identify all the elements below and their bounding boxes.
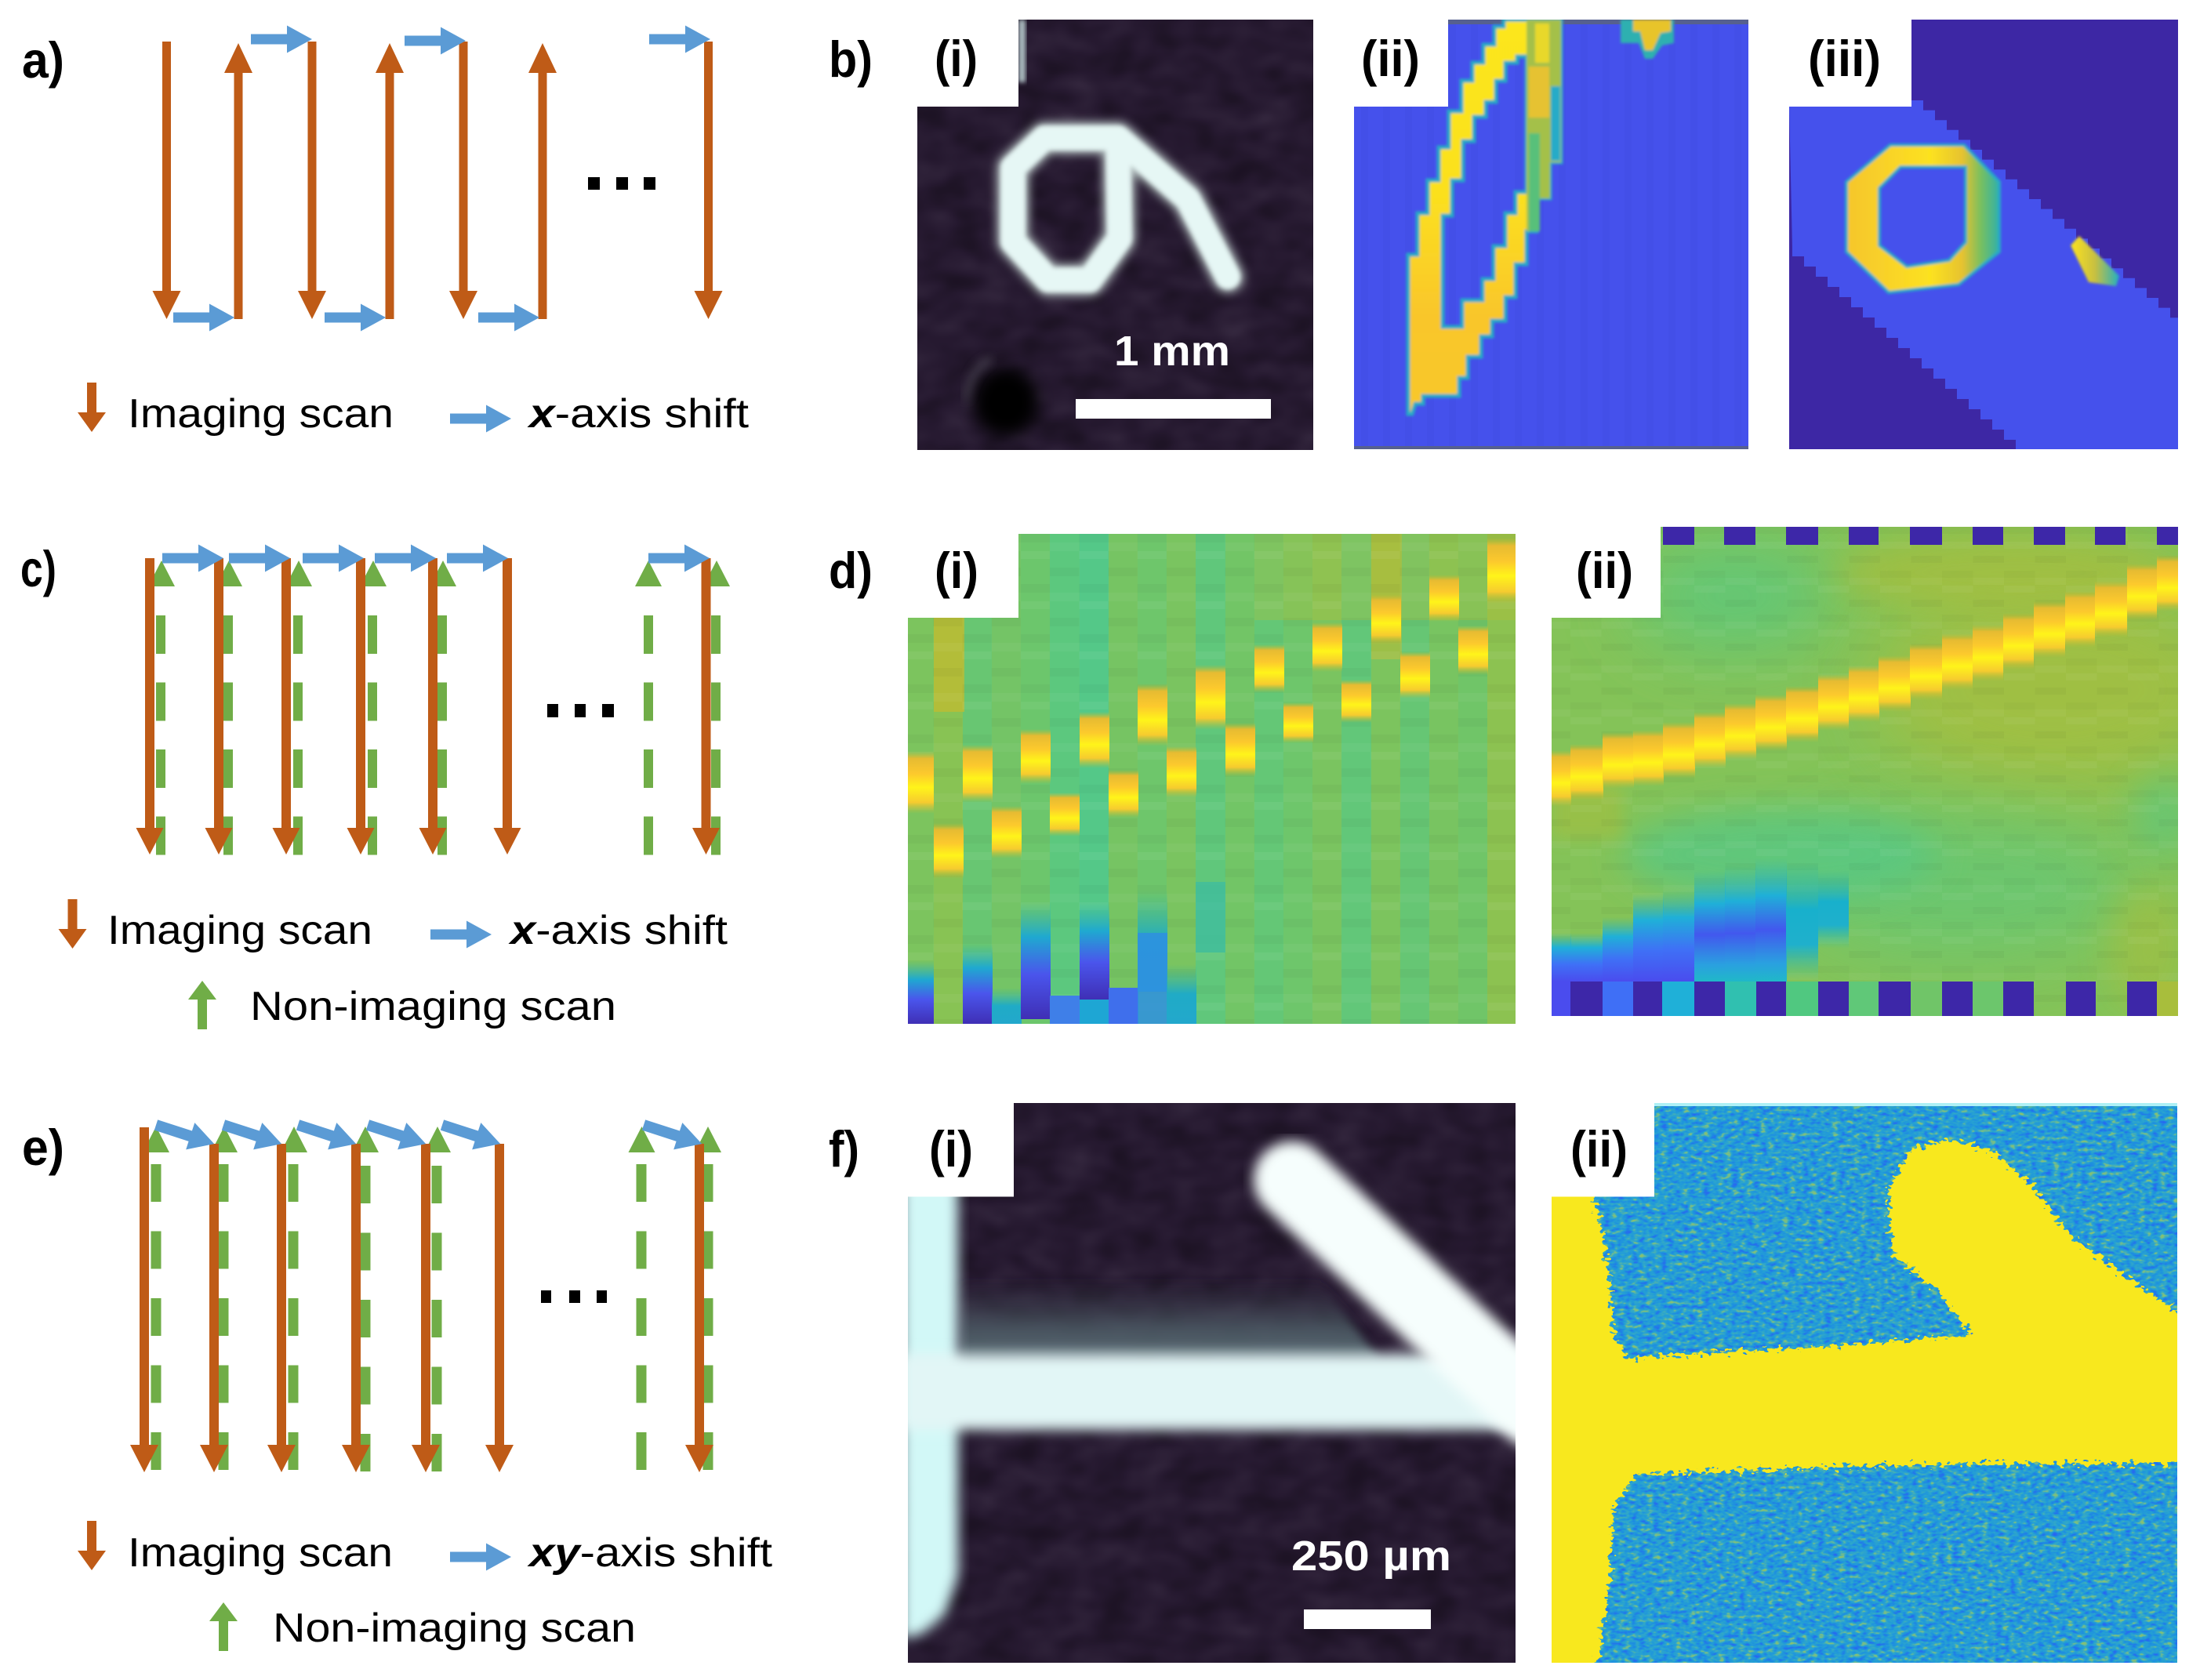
non-imaging dashed scans: [156, 1164, 708, 1473]
ellipsis: [547, 704, 614, 717]
imaging scan arrows: [152, 42, 723, 319]
top fragment: [1621, 20, 1674, 59]
white arrow shape: [902, 1176, 1537, 1638]
panel d(ii): continuous line heat map: [1552, 527, 2200, 1016]
distorted ring: [1408, 20, 1561, 414]
panel e: diagonal-shift scan diagram: [22, 1112, 773, 1651]
legend c: x-axis shift: [508, 908, 728, 953]
label boxes and panel labels: [829, 16, 1911, 1196]
bottom marker gaps and squares: [1552, 982, 2178, 1016]
legend a: x-axis shift: [527, 391, 750, 437]
panel b(ii): image with distorted ring: [1354, 20, 1748, 449]
legend e: Non-imaging scan: [273, 1606, 636, 1651]
blue blob in stepped columns: [1552, 858, 1849, 982]
panel d(i): interleaved spot heat map: [904, 534, 1531, 1024]
label c): c): [20, 540, 56, 597]
sub-panel labels: (ii): [1570, 1120, 1628, 1177]
legend c: Non-imaging scan: [250, 984, 616, 1029]
x-axis shift arrows: [162, 544, 710, 572]
xy-axis shift arrows: [151, 1112, 706, 1157]
non-imaging arrow heads: [148, 561, 730, 586]
panel f(i): photograph of arrow pattern: [902, 1103, 1537, 1663]
label d): d): [829, 542, 873, 599]
columns: [904, 534, 1518, 1024]
sub-panel labels: (i): [935, 542, 978, 599]
scale bar 1 mm: [1076, 328, 1271, 419]
lower line of spots: [934, 626, 1488, 879]
soft background tones: [1552, 533, 2200, 1011]
sub-panel labels: (ii): [1361, 30, 1420, 87]
shape: ring with tail: [1013, 138, 1228, 280]
legend e: Imaging scan: [128, 1530, 393, 1576]
panel a: serpentine scan diagram: [22, 25, 750, 437]
sub-panel labels: (iii): [1808, 30, 1881, 87]
label e): e): [22, 1119, 64, 1176]
ellipsis: [588, 177, 655, 190]
legend e: xy-axis shift: [527, 1530, 773, 1576]
sub-panel labels: (i): [935, 30, 978, 87]
x-axis shift arrows: [173, 25, 710, 331]
scale bar 250 µm: 250 µm: [1291, 1533, 1451, 1580]
diagonal stepped bright band: [1552, 555, 2178, 807]
legend e: [78, 1521, 773, 1651]
non-imaging arrow heads: [143, 1127, 721, 1152]
sub-panel labels: (ii): [1576, 542, 1633, 599]
legend c: Imaging scan: [107, 908, 372, 953]
top marker squares: [1663, 527, 2178, 545]
sub-panel labels: (i): [929, 1120, 973, 1177]
yellow arrow shape: [1533, 1140, 2195, 1680]
panel b(iii): corrected image with diagonal band: [1789, 20, 2182, 450]
label f): f): [829, 1120, 859, 1177]
sub-panel labels: [929, 30, 1881, 1177]
imaging scan arrows: [136, 558, 720, 855]
upper line of spots: [904, 538, 1517, 814]
blue streaks: [904, 882, 1225, 1024]
label b): b): [829, 31, 873, 88]
blue diagonal band: [1789, 100, 2182, 450]
legend a: [78, 383, 750, 437]
panel f(ii): noisy heat map of arrow pattern: [1533, 1103, 2195, 1680]
legend a: Imaging scan: [128, 391, 394, 437]
ellipsis: [541, 1290, 607, 1303]
legend c: [58, 899, 728, 1029]
label a): a): [22, 31, 64, 89]
non-imaging dashed scans: [161, 615, 716, 855]
scale bar 1 mm: 1 mm: [1114, 328, 1230, 375]
imaging scan arrows: [130, 1127, 713, 1472]
ring: [1846, 145, 1999, 292]
scale bar 250 µm: [1291, 1533, 1451, 1629]
panel b(i): photograph of pattern: [917, 20, 1313, 450]
panel c: interleaved unidirectional scan diagram: [20, 540, 730, 1029]
tail: [2071, 236, 2119, 286]
